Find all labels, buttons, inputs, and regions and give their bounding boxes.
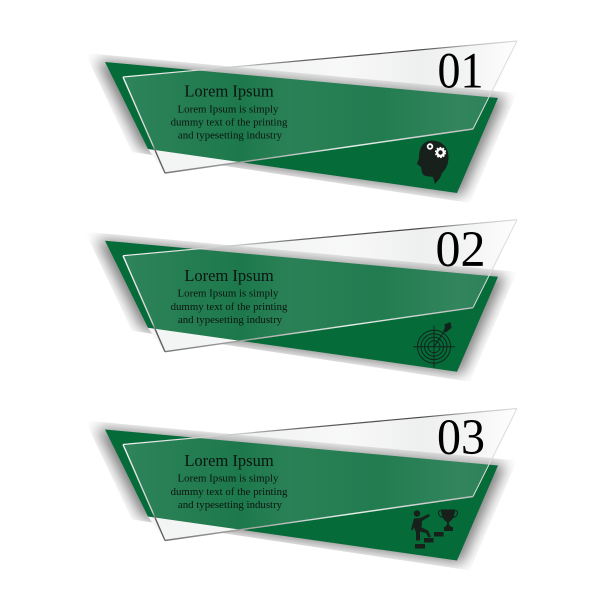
heading: banner 01: Lorem Ipsum	[184, 82, 274, 100]
text block: banner 02: and typesetting industry	[178, 314, 283, 326]
number 02: 02	[436, 222, 486, 278]
glass backing: banner 03	[190, 408, 517, 468]
heading: banner 02: Lorem Ipsum	[184, 266, 274, 285]
glass plate: banner 01	[123, 41, 517, 173]
text block: banner 01: Lorem Ipsum is simply	[178, 103, 279, 115]
shadow: banner 03	[96, 428, 506, 564]
panel: banner 02	[96, 220, 517, 375]
text block: banner 01: and typesetting industry	[178, 129, 283, 141]
green ribbon: banner 01	[105, 62, 498, 193]
text block: banner 02: Lorem Ipsum is simply	[178, 288, 279, 300]
text block: banner 01: dummy text of the printing	[171, 116, 288, 128]
green ribbon: banner 02	[105, 241, 498, 372]
glass plate: banner 02	[123, 220, 517, 352]
green ribbon: banner 03	[105, 430, 498, 560]
glass backing: banner 02	[190, 220, 517, 279]
text block: banner 03	[171, 472, 288, 511]
text block: banner 02: dummy text of the printing	[171, 301, 288, 313]
text block: banner 01	[171, 103, 288, 141]
text block: banner 03: dummy text of the printing	[171, 486, 288, 498]
shadow: banner 02	[96, 239, 506, 375]
lower glass backing: banner 03	[148, 516, 240, 540]
shadow: banner 01	[96, 60, 506, 196]
number 03: 03	[437, 410, 485, 466]
panel: banner 01	[96, 41, 517, 196]
text block: banner 02	[171, 288, 288, 326]
text block: banner 03: Lorem Ipsum is simply	[178, 472, 279, 484]
lower glass backing: banner 02	[148, 328, 240, 352]
panel: banner 03	[96, 408, 517, 564]
icon: dart target	[413, 323, 455, 368]
glass backing: banner 01	[190, 41, 517, 100]
text block: banner 03: and typesetting industry	[178, 499, 283, 511]
glass plate: banner 03	[123, 408, 517, 540]
icon: climbing stairs to trophy	[411, 510, 457, 548]
icon: head with gears	[417, 140, 449, 184]
heading: banner 03: Lorem Ipsum	[184, 451, 274, 470]
lower glass backing: banner 01	[148, 149, 240, 173]
number 01: 01	[438, 44, 484, 100]
